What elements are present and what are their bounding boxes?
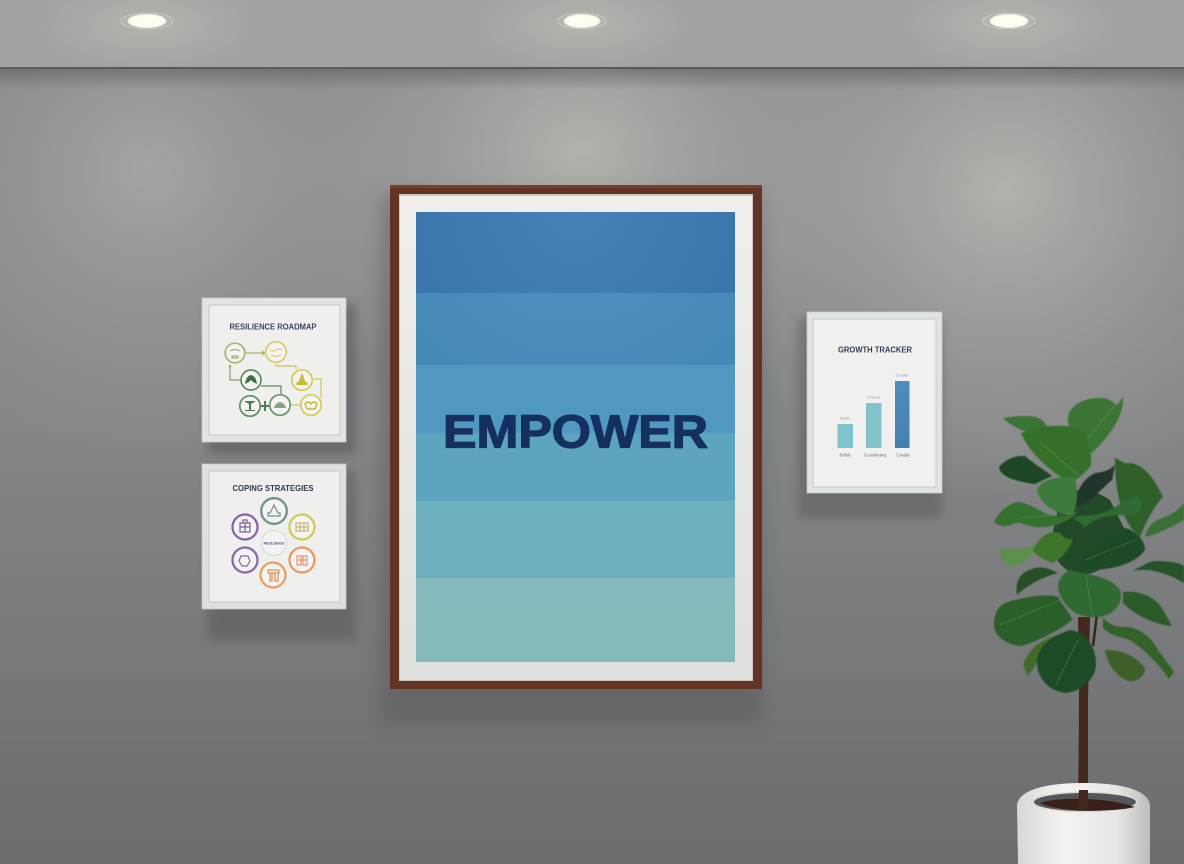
plant: [994, 397, 1184, 864]
bar chart: [838, 372, 910, 458]
poster title: EMPOWER: [443, 406, 708, 458]
value labels: Chartin: [896, 372, 908, 378]
roadmap connectors: [228, 350, 321, 411]
ceiling: [0, 0, 1184, 75]
panel: growth tracker: [807, 312, 942, 493]
heading: RESILIENCE ROADMAP: [230, 322, 317, 332]
axis labels: Cradia: [896, 452, 910, 458]
shadows of frames: [208, 194, 942, 724]
value labels: [840, 372, 908, 420]
axis labels: [839, 452, 910, 458]
ceiling light: left: [121, 13, 173, 29]
panel: coping strategies: [202, 464, 346, 609]
axis labels: 8ofsb: [839, 452, 851, 458]
leaves: front layer: [994, 397, 1145, 693]
trunk: [1078, 617, 1090, 810]
value labels: 8e5ib: [840, 416, 851, 420]
axis labels: Curaltmarq: [864, 452, 887, 458]
panel: main poster frame: [390, 185, 762, 689]
ceiling light: centre: [558, 13, 606, 29]
pot: [1017, 783, 1150, 864]
leaf veins: [1000, 405, 1135, 685]
leaves: dark foliage mass: [1050, 490, 1130, 575]
strategy rings: [232, 498, 314, 588]
value labels: Chance: [867, 394, 881, 400]
strategy glyphs: [239, 505, 308, 581]
poster colour bands: [416, 212, 735, 662]
centre node: RESILIENCE: [264, 540, 285, 546]
panel: resilience roadmap: [202, 298, 346, 442]
centre node: [262, 530, 286, 556]
heading: COPING STRATEGIES: [232, 483, 314, 493]
heading: GROWTH TRACKER: [838, 346, 912, 354]
ceiling light: right: [983, 13, 1035, 29]
roadmap node glyphs: [230, 349, 317, 411]
roadmap nodes: [225, 342, 321, 416]
leaves: back layer: [999, 416, 1184, 681]
